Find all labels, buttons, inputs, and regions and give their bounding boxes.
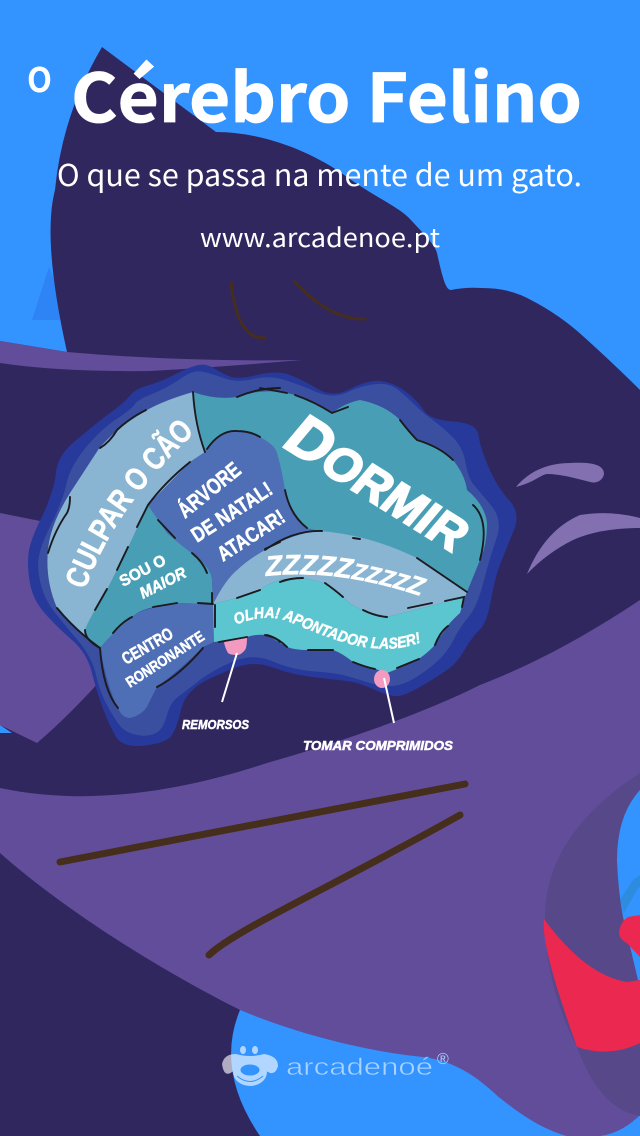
callout line: remorsos (222, 653, 237, 702)
red nose (619, 915, 640, 957)
text: sou o: SOU O (117, 552, 169, 591)
region: remorsos (224, 637, 247, 655)
subtitle: O que se passa na mente de um gato. (57, 151, 582, 195)
text: zzzzz: ZZZZZZZZZZ (265, 554, 428, 596)
region: sou o maior (85, 505, 213, 648)
text: atacar: ATACAR! (213, 506, 289, 566)
text: culpar o cão: CULPAR O CÃO (66, 420, 191, 586)
eye lines (231, 282, 365, 338)
region: culpar o cão (47, 392, 205, 648)
label: tomar comprimidos: TOMAR COMPRIMIDOS (303, 738, 453, 753)
red tongue (544, 919, 640, 1052)
label: remorsos: REMORSOS (182, 717, 249, 732)
brain outer edge (28, 365, 517, 746)
region: centro ronronante (100, 603, 214, 718)
dashed outlines (48, 388, 484, 708)
title letter o: O (27, 53, 52, 102)
logo wordmark: arcadenoé (286, 1054, 433, 1081)
blue blob bottom (231, 1010, 567, 1136)
cat ear band (0, 341, 302, 371)
region: dormir (193, 391, 487, 592)
text: olha apontador laser: OLHA! APONTADOR LASER! (234, 606, 420, 649)
region: árvore de natal (148, 431, 320, 604)
registered mark: ® (437, 1051, 449, 1068)
light purple brow 1 (516, 463, 604, 487)
left purple paw (0, 513, 120, 743)
text: maior: MAIOR (137, 565, 190, 603)
title: Cérebro Felino (71, 45, 582, 142)
text: dormir: DORMIR (272, 403, 488, 563)
logo icon (222, 1046, 278, 1086)
region: zzz (213, 531, 467, 617)
logo (222, 1046, 449, 1086)
text: ronronante: RONRONANTE (123, 628, 208, 691)
text: de natal: DE NATAL! (187, 478, 277, 547)
brain (28, 364, 516, 746)
text: árvore: ÁRVORE (172, 457, 246, 523)
purple cat body (0, 600, 640, 1136)
region: tomar comprimidos (374, 670, 390, 688)
darker purple tail shape (545, 773, 640, 1116)
faint blue stripe (620, 875, 640, 913)
website: www.arcadenoe.pt (200, 218, 440, 255)
blue gap at right edge (617, 790, 640, 980)
whiskers (60, 784, 465, 955)
light purple brow 2 (527, 513, 640, 574)
callout line: tomar comprimidos (384, 678, 394, 723)
brain middle edge (38, 371, 499, 736)
text: centro: CENTRO (118, 624, 176, 668)
region: apontador laser (213, 578, 465, 673)
